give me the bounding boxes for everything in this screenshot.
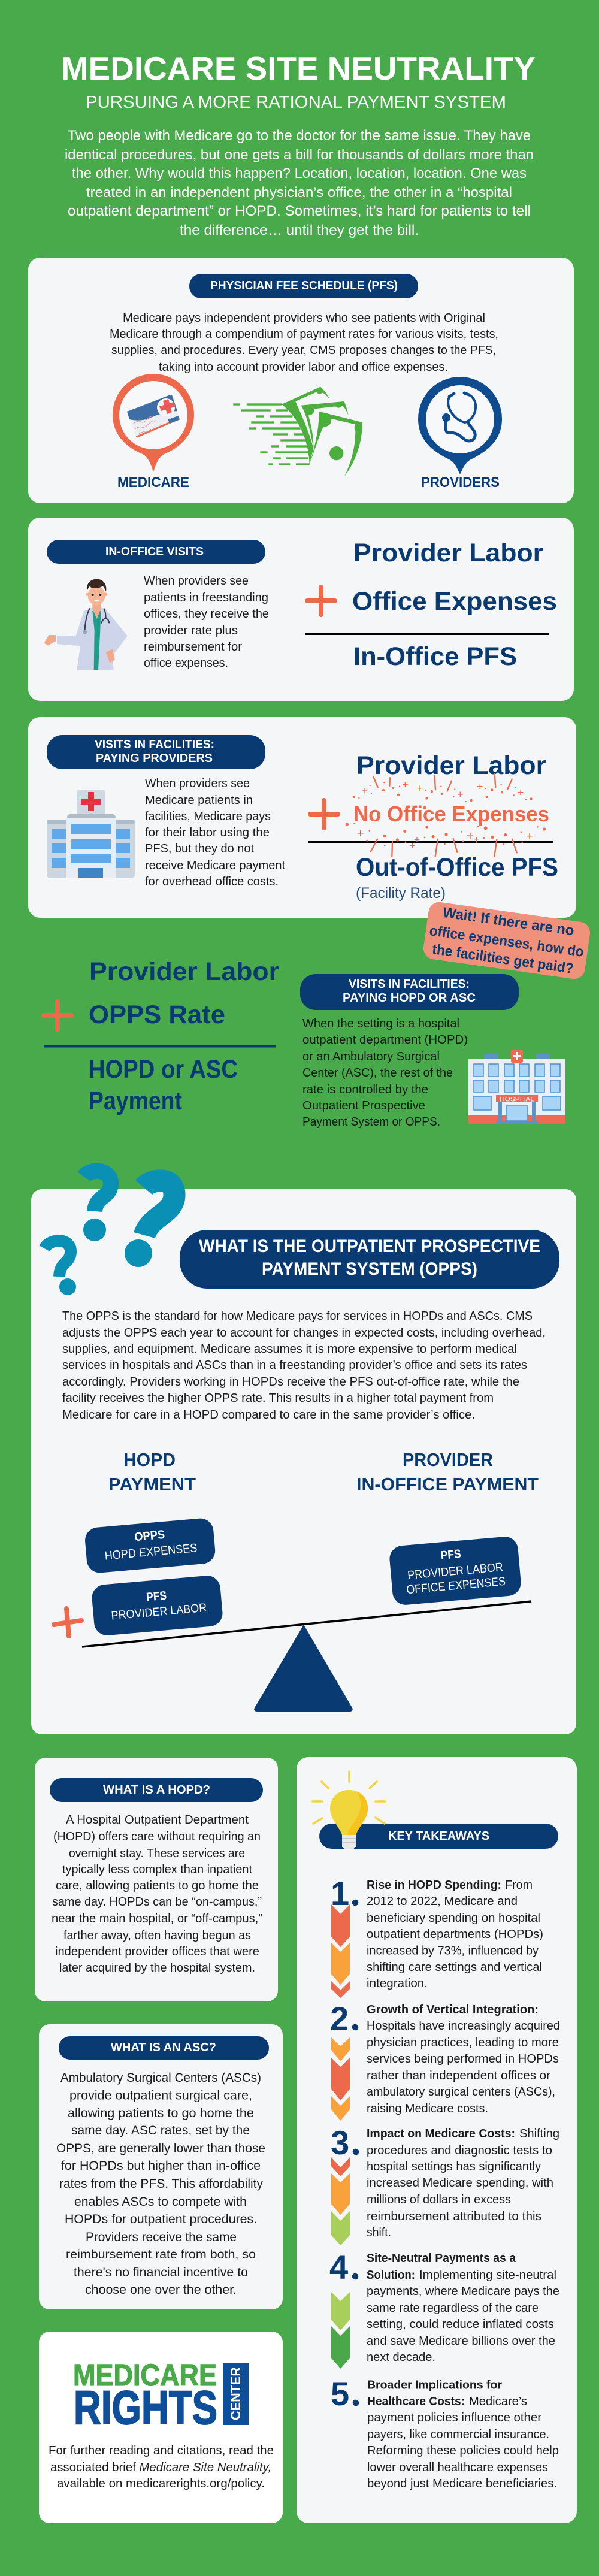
callout: wait, how do facilities get paid: office expenses, how do — [428, 923, 585, 960]
icon: hospital — [47, 790, 135, 878]
formula: HOPD or ASC payment: Provider Labor — [89, 957, 279, 986]
heading pill: in-office visits — [47, 540, 265, 564]
HOPD or ASC description: or an Ambulatory Surgical — [302, 1050, 440, 1063]
in-office description: reimbursement for — [144, 640, 242, 654]
formula: in-office PFS: Office Expenses — [352, 587, 557, 616]
HOPD or ASC description: rate is controlled by the — [302, 1083, 428, 1096]
HOPD description: care, allowing patients to go home the — [56, 1879, 259, 1892]
OPPS description: facility receives the higher OPPS rate. This results in a higher total payment from — [62, 1392, 494, 1405]
PFS description: Medicare through a compendium of payment rates for various visits, tests, — [110, 328, 498, 341]
heading pill: paying HOPD or ASC — [300, 974, 519, 1010]
takeaway 1 — [331, 1874, 543, 1998]
formula: HOPD or ASC payment — [44, 957, 279, 1115]
takeaway 4: payments, where Medicare pays the — [367, 2285, 559, 2298]
takeaway 4: next decade. — [367, 2351, 435, 2364]
HOPD description: near the main hospital, or “off-campus,” — [52, 1912, 262, 1925]
facilities description: Medicare patients in — [145, 794, 253, 807]
takeaway 5: payers, like commercial insurance. — [367, 2428, 549, 2441]
takeaway 4: setting, could reduce inflated costs — [367, 2318, 554, 2331]
block: PFS provider labor — [91, 1574, 223, 1637]
panel: what is an ASC — [39, 2024, 283, 2309]
takeaway 5: 5 — [331, 2375, 349, 2412]
ASC description: HOPDs for outpatient procedures. — [65, 2212, 257, 2226]
takeaway 3: shift. — [367, 2226, 391, 2239]
ASC description: Ambulatory Surgical Centers (ASCs) — [60, 2071, 261, 2085]
in-office description: offices, they receive the — [144, 607, 269, 621]
panel: key takeaways — [297, 1757, 577, 2523]
facilities description: for overhead office costs. — [145, 875, 279, 888]
block: PFS provider labor and office expenses: OFFICE EXPENSES — [406, 1575, 506, 1597]
plus sign on scale — [54, 1609, 81, 1636]
HOPD description: independent provider offices that were — [55, 1945, 259, 1958]
icon: flying money — [233, 387, 362, 476]
takeaway 4: and save Medicare billions over the — [367, 2335, 555, 2348]
subtitle: PURSUING A MORE RATIONAL PAYMENT SYSTEM — [86, 93, 506, 112]
formula: HOPD or ASC payment: Payment — [89, 1087, 182, 1115]
heading pill: what is a HOPD — [50, 1778, 263, 1802]
heading pill: what is an ASC — [59, 2036, 269, 2060]
takeaway 2: Growth of Vertical Integration: — [367, 2003, 539, 2016]
formula: HOPD or ASC payment: OPPS Rate — [89, 1000, 225, 1029]
takeaway 1: 1 — [331, 1874, 349, 1912]
takeaway 5: Broader Implications for — [367, 2378, 502, 2391]
takeaway 4 — [329, 2248, 559, 2369]
logo: Medicare Rights Center: MEDICARE — [73, 2358, 217, 2392]
ASC description: for HOPDs but higher than in-office — [61, 2159, 261, 2173]
takeaway 4: same rate regardless of the care — [367, 2302, 539, 2315]
HOPD description — [52, 1813, 262, 1975]
takeaway 1: outpatient departments (HOPDs) — [367, 1928, 543, 1941]
logo: Medicare Rights Center: CENTER — [228, 2367, 243, 2420]
panel: what is a HOPD — [35, 1758, 278, 2001]
icon: question marks — [44, 1171, 174, 1295]
scale beam — [82, 1601, 531, 1647]
takeaway 1: integration. — [367, 1977, 428, 1990]
in-office description — [144, 575, 269, 670]
in-office description: office expenses. — [144, 657, 228, 670]
heading pill: what is the OPPS: WHAT IS THE OUTPATIENT PROSPECTIVE — [199, 1236, 540, 1256]
takeaway 3: 3 — [331, 2124, 349, 2161]
takeaway 2: physician practices, leading to more — [367, 2036, 559, 2049]
OPPS description: adjusts the OPPS each year to account for changes in expected costs, including overhead, — [62, 1326, 546, 1340]
formula: out-of-office PFS: No Office Expenses — [353, 802, 549, 826]
facilities description: PFS, but they do not — [145, 842, 254, 855]
intro paragraph: Two people with Medicare go to the doctor for the same issue. They have — [68, 128, 531, 144]
citation text: available on medicarerights.org/policy. — [57, 2477, 265, 2490]
takeaway 3 — [331, 2124, 559, 2245]
takeaway 2: services being performed in HOPDs — [367, 2052, 559, 2066]
HOPD description: farther away, often having begun as — [63, 1929, 251, 1942]
panel: what is the OPPS — [31, 1171, 576, 1734]
ASC description — [56, 2071, 265, 2297]
intro paragraph: treated in an independent physician’s office, the other in a “hospital — [86, 185, 512, 201]
HOPD description: overnight stay. These services are — [69, 1847, 245, 1860]
HOPD or ASC description: outpatient department (HOPD) — [302, 1033, 468, 1047]
PFS description — [110, 312, 498, 374]
takeaway 2: Hospitals have increasingly acquired — [367, 2019, 560, 2033]
panel: visits in facilities, paying providers — [28, 717, 576, 918]
HOPD description: (HOPD) offers care without requiring an — [53, 1830, 261, 1843]
heading pill: key takeaways: KEY TAKEAWAYS — [388, 1830, 489, 1843]
heading pill: what is the OPPS — [180, 1230, 559, 1289]
facilities description: receive Medicare payment — [145, 859, 285, 872]
block: OPPS HOPD expenses: OPPS — [134, 1528, 165, 1544]
takeaway 1: 2012 to 2022, Medicare and — [367, 1895, 518, 1908]
block: OPPS HOPD expenses: HOPD EXPENSES — [104, 1541, 198, 1563]
takeaway 2: ambulatory surgical centers (ASCs), — [367, 2085, 555, 2099]
formula: HOPD or ASC payment: HOPD or ASC — [89, 1055, 238, 1084]
ASC description: OPPS, are generally lower than those — [56, 2142, 265, 2155]
panel: in-office visits — [28, 518, 574, 701]
PFS description: Medicare pays independent providers who see patients with Original — [123, 312, 485, 325]
ASC description: same day. ASC rates, set by the — [71, 2124, 250, 2137]
formula: out-of-office PFS: Out-of-Office PFS — [356, 853, 558, 882]
takeaway 3: increased Medicare spending, with — [367, 2176, 553, 2190]
heading pill: PFS: PHYSICIAN FEE SCHEDULE (PFS) — [210, 279, 398, 292]
ASC description: allowing patients to go home the — [68, 2106, 254, 2120]
column title: HOPD payment: HOPD — [123, 1449, 176, 1470]
column title: HOPD payment: PAYMENT — [108, 1474, 196, 1495]
column title: HOPD payment — [108, 1449, 196, 1495]
OPPS description — [62, 1310, 546, 1422]
HOPD or ASC description: Outpatient Prospective — [302, 1099, 425, 1112]
ASC description: reimbursement rate from both, so — [66, 2248, 256, 2261]
heading pill: what is a HOPD: WHAT IS A HOPD? — [103, 1783, 210, 1797]
block: PFS provider labor and office expenses: PFS — [440, 1547, 462, 1562]
takeaway 2 — [330, 2000, 560, 2121]
takeaway 5: beyond just Medicare beneficiaries. — [367, 2477, 557, 2490]
intro paragraph: outpatient department” or HOPD. Sometimes, it’s hard for patients to tell — [68, 203, 531, 219]
logo: Medicare Rights Center — [73, 2358, 249, 2434]
takeaway 5: payment policies influence other — [367, 2411, 541, 2424]
takeaway 4: Site-Neutral Payments as a — [367, 2252, 516, 2265]
icon: medicare pin with card — [113, 374, 194, 472]
in-office description: patients in freestanding — [144, 591, 268, 604]
takeaway 3: Impact on Medicare Costs: — [367, 2127, 515, 2140]
title: MEDICARE SITE NEUTRALITY — [61, 50, 536, 87]
column title: provider in-office payment: PROVIDER — [403, 1449, 493, 1470]
takeaway 3: Shifting — [519, 2127, 559, 2140]
heading pill: paying providers — [47, 735, 265, 769]
HOPD or ASC description: Center (ASC), the rest of the — [302, 1066, 453, 1080]
intro paragraph: the difference… until they get the bill. — [180, 222, 419, 238]
callout: wait, how do facilities get paid: Wait! If there are no — [442, 905, 575, 939]
formula: in-office PFS: In-Office PFS — [353, 642, 517, 671]
OPPS description: services in hospitals and ASCs than in a freestanding provider’s office and sets its rates — [62, 1359, 527, 1372]
HOPD description: later acquired by the hospital system. — [59, 1961, 255, 1975]
formula: out-of-office PFS: (Facility Rate) — [356, 885, 446, 902]
callout: wait, how do facilities get paid: the facilities get paid? — [431, 941, 574, 977]
formula: in-office PFS: Provider Labor — [353, 539, 543, 567]
takeaway 3: reimbursement attributed to this — [367, 2210, 541, 2223]
takeaway 1: From — [505, 1879, 533, 1892]
label: providers: PROVIDERS — [421, 474, 500, 491]
PFS description: taking into account provider labor and office expenses. — [159, 361, 448, 374]
formula: out-of-office PFS — [308, 751, 558, 902]
OPPS description: The OPPS is the standard for how Medicare pays for services in HOPDs and ASCs. CMS — [62, 1310, 533, 1323]
takeaway 1: Rise in HOPD Spending: — [367, 1879, 501, 1892]
callout: wait, how do facilities get paid — [422, 901, 591, 980]
takeaway 5: lower overall healthcare expenses — [367, 2461, 548, 2474]
OPPS description: Medicare for care in a HOPD compared to care in the same provider’s office. — [62, 1408, 475, 1422]
HOPD description: same day. HOPDs can be “on-campus,” — [52, 1895, 262, 1909]
heading pill: paying providers: VISITS IN FACILITIES: — [95, 738, 214, 751]
takeaway 5: Healthcare Costs: — [367, 2395, 465, 2408]
takeaway 1: shifting care settings and vertical — [367, 1961, 542, 1974]
icon: light bulb — [313, 1771, 385, 1849]
OPPS description: supplies, and equipment. Medicare assumes it is more expensive to perform medical — [62, 1343, 517, 1356]
heading pill: paying providers: PAYING PROVIDERS — [96, 752, 213, 765]
ASC description: provide outpatient surgical care, — [69, 2088, 252, 2103]
HOPD description: typically less complex than inpatient — [62, 1863, 252, 1876]
block: PFS provider labor: PFS — [146, 1589, 167, 1604]
heading pill: what is an ASC: WHAT IS AN ASC? — [111, 2041, 216, 2054]
burst sparkles around no office expenses — [346, 774, 546, 857]
formula: out-of-office PFS: Provider Labor — [356, 751, 546, 780]
heading pill: PFS — [189, 274, 418, 298]
takeaway 1: beneficiary spending on hospital — [367, 1912, 540, 1925]
intro paragraph: identical procedures, but one gets a bill for thousands of dollars more than — [65, 147, 534, 163]
ASC description: enables ASCs to compete with — [74, 2195, 247, 2209]
takeaway 2: rather than independent offices or — [367, 2069, 550, 2082]
citation text: associated brief Medicare Site Neutrality, — [50, 2461, 271, 2474]
ASC description: Providers receive the same — [86, 2230, 237, 2244]
takeaway 3: hospital settings has significantly — [367, 2160, 541, 2173]
scale fulcrum — [254, 1625, 353, 1712]
ASC description: rates from the PFS. This affordability — [59, 2177, 263, 2191]
icon: doctor — [44, 579, 128, 670]
takeaway 4: Implementing site-neutral — [419, 2269, 556, 2282]
column title: provider in-office payment — [356, 1449, 539, 1495]
column title: provider in-office payment: IN-OFFICE PAYMENT — [356, 1474, 539, 1495]
facilities description — [145, 777, 285, 888]
heading pill: what is the OPPS: PAYMENT SYSTEM (OPPS) — [262, 1259, 477, 1279]
citation text — [49, 2444, 274, 2490]
block: PFS provider labor and office expenses: PROVIDER LABOR — [407, 1561, 504, 1582]
takeaway 5: Reforming these policies could help — [367, 2444, 559, 2457]
in-office description: When providers see — [144, 575, 249, 588]
in-office description: provider rate plus — [144, 624, 238, 637]
PFS description: supplies, and procedures. Every year, CMS proposes changes to the PFS, — [111, 344, 496, 357]
citation text: For further reading and citations, read the — [49, 2444, 274, 2457]
OPPS description: accordingly. Providers working in HOPDs receive the PFS out-of-office rate, while the — [62, 1375, 519, 1389]
ASC description: there's no financial incentive to — [74, 2266, 248, 2279]
block: OPPS HOPD expenses — [84, 1517, 216, 1574]
HOPD description: A Hospital Outpatient Department — [66, 1813, 249, 1827]
HOPD or ASC description — [302, 1017, 468, 1129]
block: PFS provider labor: PROVIDER LABOR — [111, 1601, 207, 1623]
icon: providers pin with stethoscope — [418, 377, 502, 474]
takeaway 3: millions of dollars in excess — [367, 2193, 511, 2206]
facilities description: for their labor using the — [145, 826, 270, 839]
takeaway 1: increased by 73%, influenced by — [367, 1945, 539, 1958]
takeaway 4: 4 — [329, 2248, 348, 2286]
HOPD or ASC description: When the setting is a hospital — [302, 1017, 459, 1030]
logo: Medicare Rights Center: RIGHTS — [74, 2381, 217, 2434]
heading pill: in-office visits: IN-OFFICE VISITS — [105, 545, 204, 558]
heading pill: paying HOPD or ASC: VISITS IN FACILITIES: — [349, 978, 470, 991]
icon: hospital building: HOSPITAL — [500, 1096, 534, 1103]
HOPD or ASC description: Payment System or OPPS. — [302, 1115, 440, 1129]
takeaway 2: raising Medicare costs. — [367, 2102, 488, 2115]
takeaway 5 — [331, 2375, 559, 2490]
facilities description: facilities, Medicare pays — [145, 810, 271, 823]
label: medicare: MEDICARE — [117, 474, 189, 491]
takeaway 5: Medicare’s — [469, 2395, 527, 2408]
heading pill: paying HOPD or ASC: PAYING HOPD OR ASC — [343, 991, 476, 1005]
intro paragraph: the other. Why would this happen? Location, location, location. One was — [72, 165, 527, 182]
intro paragraph — [65, 128, 534, 238]
ASC description: choose one over the other. — [85, 2283, 237, 2297]
takeaway 4: Solution: — [367, 2269, 415, 2282]
icon: hospital building — [468, 1050, 565, 1124]
heading pill: key takeaways — [319, 1824, 558, 1849]
panel: Medicare Rights Center logo and citation — [39, 2332, 283, 2523]
takeaway 3: procedures and diagnostic tests to — [367, 2144, 552, 2157]
facilities description: When providers see — [145, 777, 250, 790]
takeaway 2: 2 — [330, 2000, 349, 2037]
block: PFS provider labor and office expenses — [389, 1535, 522, 1606]
formula: in-office PFS — [305, 539, 557, 671]
panel: physician fee schedule — [28, 258, 574, 503]
